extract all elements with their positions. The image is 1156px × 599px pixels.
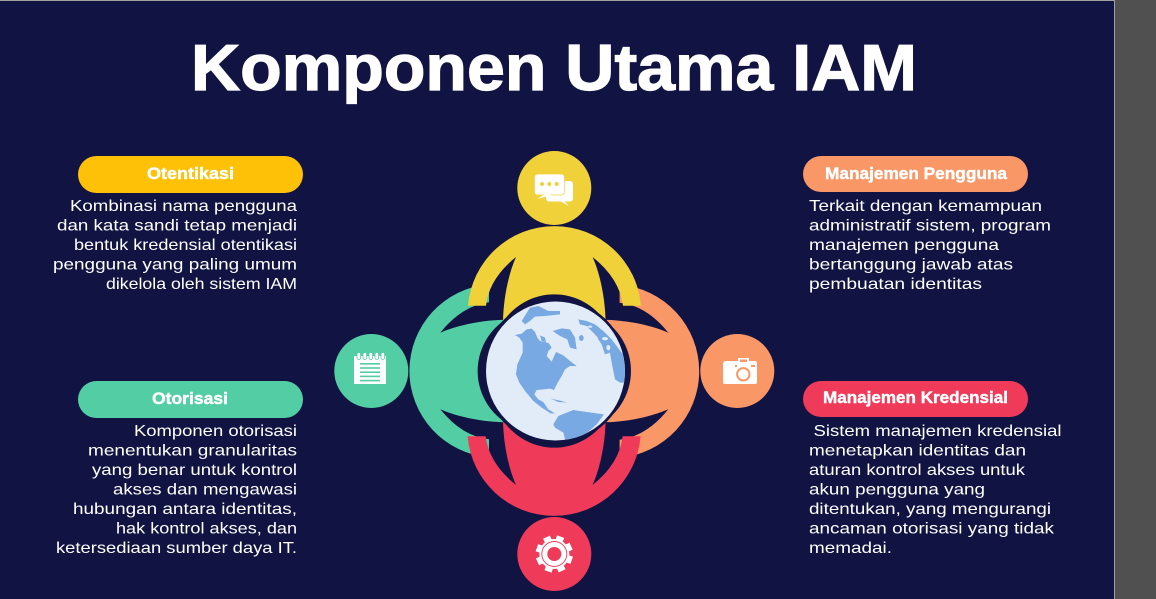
text: Manajemen Kredensial description: Sistem manajemen kredensial — [814, 423, 1062, 440]
text: Otentikasi description: dan kata sandi tetap menjadi — [57, 218, 297, 234]
text: Otorisasi description: menentukan granularitas — [88, 442, 297, 460]
figure: yellow (top) — [468, 151, 641, 322]
pill: Manajemen Kredensial: Manajemen Kredensial — [823, 389, 1008, 407]
text: Manajemen Kredensial description — [809, 423, 1062, 557]
icon: camera — [723, 358, 757, 384]
text: Otorisasi description: hubungan antara identitas, — [73, 501, 297, 518]
panel: Otorisasi — [56, 381, 303, 557]
text: Manajemen Kredensial description: menetapkan identitas dan — [809, 442, 1026, 460]
icon: gear — [531, 530, 578, 578]
pill: Manajemen Pengguna: Manajemen Pengguna — [825, 165, 1008, 183]
figure: green (left) — [334, 284, 505, 457]
text: Manajemen Pengguna description: administratif sistem, program — [809, 218, 1051, 234]
text: Otentikasi description: pengguna yang paling umum — [53, 256, 297, 274]
text: Manajemen Kredensial description: memadai. — [809, 540, 892, 557]
text: Otentikasi description: bentuk kredensial otentikasi — [74, 237, 297, 254]
pill: Otorisasi: Otorisasi — [152, 390, 228, 408]
pill: Manajemen Pengguna — [803, 156, 1028, 192]
diagram: four figures around globe — [334, 151, 774, 591]
pill: Otorisasi — [78, 381, 303, 418]
figure: orange (right) — [603, 285, 774, 458]
panel: Manajemen Kredensial — [803, 381, 1062, 557]
text: Manajemen Kredensial description: aturan kontrol akses untuk — [809, 462, 1026, 479]
text: Otorisasi description: akses dan mengawasi — [113, 482, 297, 498]
panel: Manajemen Pengguna — [803, 156, 1051, 293]
text: Otorisasi description — [56, 423, 297, 557]
text: Manajemen Kredensial description: ancaman otorisasi yang tidak — [809, 520, 1055, 538]
text: Manajemen Kredensial description: akun pengguna yang — [809, 482, 985, 498]
text: Otorisasi description: ketersediaan sumber daya IT. — [56, 540, 297, 557]
icon: notepad — [354, 352, 386, 384]
text: Otentikasi description — [53, 198, 297, 293]
pill: Otentikasi: Otentikasi — [147, 165, 234, 183]
text: Otentikasi description: Kombinasi nama pengguna — [70, 198, 297, 215]
text: Manajemen Pengguna description — [809, 198, 1051, 293]
panel: Otentikasi — [53, 156, 303, 293]
text: Manajemen Kredensial description: ditentukan, yang mengurangi — [809, 501, 1051, 518]
text: Manajemen Pengguna description: Terkait dengan kemampuan — [809, 198, 1042, 215]
text: Otentikasi description: dikelola oleh sistem IAM — [106, 276, 297, 293]
text: Otorisasi description: yang benar untuk kontrol — [92, 462, 297, 479]
text: Manajemen Pengguna description: pembuatan identitas — [809, 276, 982, 293]
title: Komponen Utama IAM — [191, 31, 917, 104]
pill: Otentikasi — [78, 156, 303, 193]
icon: chat bubbles — [534, 174, 573, 206]
figure: red (bottom) — [468, 420, 641, 591]
globe — [482, 298, 628, 444]
text: Otorisasi description: hak kontrol akses, dan — [116, 520, 297, 538]
pill: Manajemen Kredensial — [803, 381, 1028, 417]
text: Manajemen Pengguna description: bertanggung jawab atas — [809, 256, 1013, 274]
text: Otorisasi description: Komponen otorisasi — [134, 423, 297, 440]
text: Manajemen Pengguna description: manajemen pengguna — [809, 237, 999, 254]
